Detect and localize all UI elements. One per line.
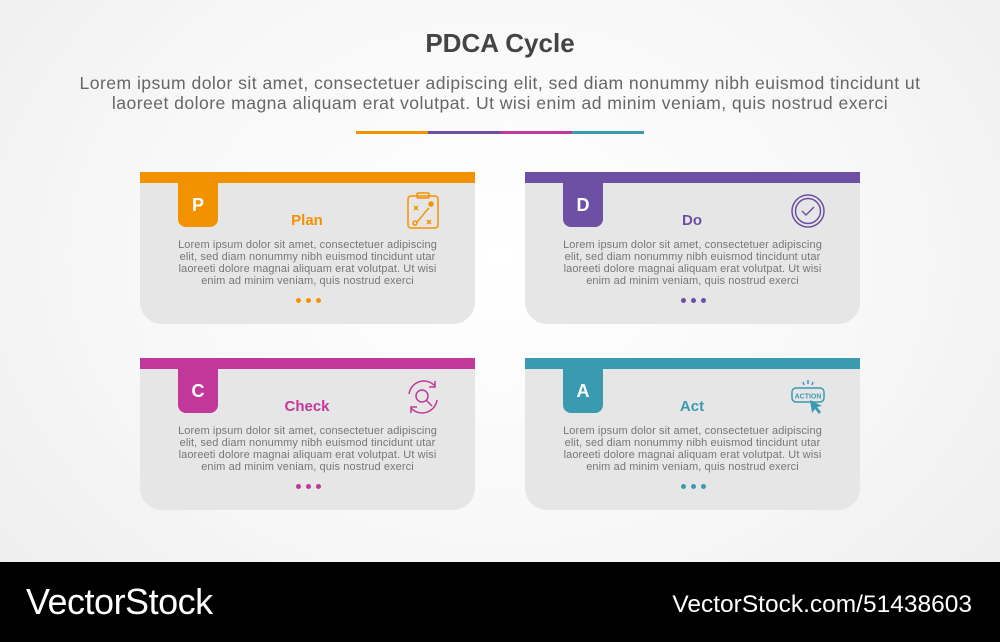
text plan: elit, sed diam nonummy nibh euismod tincidunt utar bbox=[180, 251, 435, 263]
badge C: C bbox=[192, 381, 204, 401]
text act: elit, sed diam nonummy nibh euismod tincidunt utar bbox=[565, 437, 820, 449]
color divider bbox=[356, 131, 644, 134]
text check bbox=[178, 425, 437, 473]
badge A bbox=[563, 369, 603, 413]
badge A: A bbox=[576, 381, 590, 401]
text check: laoreeti dolore magnai aliquam erat volutpat. Ut wisi bbox=[179, 449, 436, 461]
panel: act bbox=[525, 358, 860, 510]
text do: enim ad minim veniam, quis nostrud exerci bbox=[586, 275, 799, 287]
badge P: P bbox=[192, 195, 204, 215]
icon: clipboard bbox=[407, 192, 439, 229]
badge D: D bbox=[576, 195, 590, 215]
heading check: Check bbox=[284, 398, 330, 415]
dots bbox=[296, 298, 321, 303]
subtitle: Lorem ipsum dolor sit amet, consectetuer adipiscing elit, sed diam nonummy nibh euismod tincidunt ut bbox=[79, 73, 921, 93]
icon: magnifier cycle bbox=[408, 380, 438, 414]
text check: elit, sed diam nonummy nibh euismod tincidunt utar bbox=[180, 437, 435, 449]
badge C bbox=[178, 369, 218, 413]
subtitle: laoreet dolore magna aliquam erat volutpat. Ut wisi enim ad minim veniam, quis nostrud exerci bbox=[112, 93, 888, 113]
footer bar bbox=[0, 562, 1000, 642]
text check: Lorem ipsum dolor sit amet, consectetuer adipiscing bbox=[178, 425, 437, 437]
text act: laoreeti dolore magnai aliquam erat volutpat. Ut wisi bbox=[564, 449, 821, 461]
text plan: enim ad minim veniam, quis nostrud exerci bbox=[201, 275, 414, 287]
title: PDCA Cycle bbox=[425, 28, 575, 58]
dots bbox=[681, 484, 706, 489]
text do: Lorem ipsum dolor sit amet, consectetuer adipiscing bbox=[563, 239, 822, 251]
text act: enim ad minim veniam, quis nostrud exerci bbox=[586, 461, 799, 473]
heading plan: Plan bbox=[291, 212, 323, 229]
icon: action button bbox=[791, 380, 825, 414]
text do bbox=[563, 239, 822, 287]
dots bbox=[681, 298, 706, 303]
text do: elit, sed diam nonummy nibh euismod tincidunt utar bbox=[565, 251, 820, 263]
subtitle bbox=[79, 73, 921, 113]
dots bbox=[296, 484, 321, 489]
text plan bbox=[178, 239, 437, 287]
heading act: Act bbox=[680, 398, 704, 415]
text plan: laoreeti dolore magnai aliquam erat volutpat. Ut wisi bbox=[179, 263, 436, 275]
text check: enim ad minim veniam, quis nostrud exerci bbox=[201, 461, 414, 473]
footer url: VectorStock.com/51438603 bbox=[672, 591, 972, 618]
heading do: Do bbox=[682, 212, 702, 229]
footer logo: VectorStock bbox=[26, 581, 213, 622]
badge P bbox=[178, 183, 218, 227]
text do: laoreeti dolore magnai aliquam erat volutpat. Ut wisi bbox=[564, 263, 821, 275]
badge D bbox=[563, 183, 603, 227]
text act: Lorem ipsum dolor sit amet, consectetuer adipiscing bbox=[563, 425, 822, 437]
icon: check circle bbox=[791, 194, 825, 228]
panel: do bbox=[525, 172, 860, 324]
panel: plan bbox=[140, 172, 475, 324]
icon: action button: ACTION bbox=[795, 394, 821, 400]
panel: check bbox=[140, 358, 475, 510]
text plan: Lorem ipsum dolor sit amet, consectetuer adipiscing bbox=[178, 239, 437, 251]
text act bbox=[563, 425, 822, 473]
